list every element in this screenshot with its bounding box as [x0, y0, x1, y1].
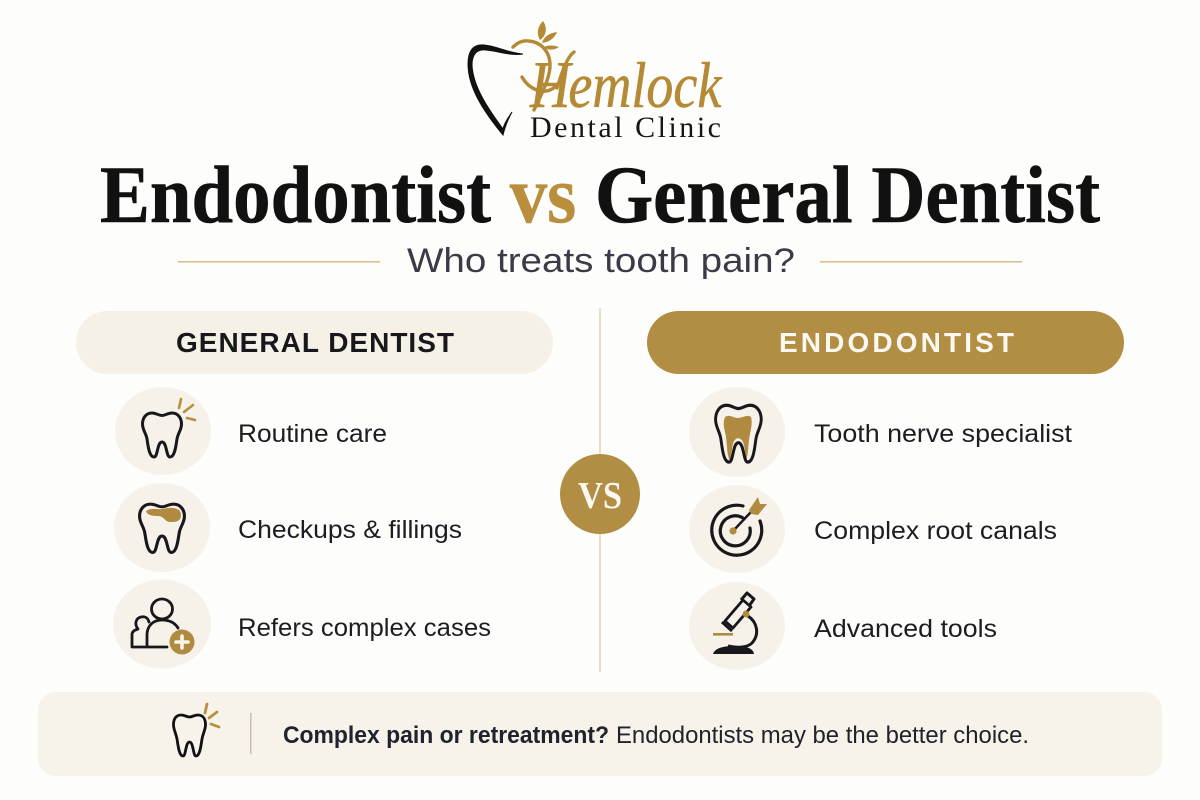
logo: gold flourish [513, 41, 574, 110]
item: routine care [115, 387, 387, 475]
heading: general dentist [76, 311, 553, 374]
logo: script name: Hemlock [529, 48, 723, 122]
item: tooth nerve specialist: Tooth nerve specialist [814, 420, 1072, 448]
icon: tooth with pulp [689, 387, 785, 477]
item: refers complex cases: Refers complex cases [238, 614, 491, 642]
logo: leaves [538, 21, 559, 50]
icon: people with plus [113, 580, 211, 668]
item: advanced tools [689, 582, 997, 670]
item: routine care: Routine care [238, 420, 387, 448]
icon: tooth with sparkle [115, 387, 211, 475]
heading: endodontist: ENDODONTIST [779, 327, 1014, 358]
item: refers complex cases [113, 580, 491, 668]
logo: tooth outline [468, 45, 523, 135]
subtitle: Who treats tooth pain? [407, 242, 795, 280]
callout text: Endodontists may be the better choice. [616, 722, 1029, 749]
heading: general dentist: GENERAL DENTIST [176, 327, 454, 358]
item: checkups and fillings [114, 483, 462, 572]
callout text: Complex pain or retreatment? [283, 722, 609, 749]
item: tooth nerve specialist [689, 387, 1072, 477]
item: checkups and fillings: Checkups & fillings [238, 516, 462, 544]
center divider [599, 308, 601, 672]
item: complex root canals [689, 485, 1057, 573]
callout [38, 692, 1162, 776]
icon: microscope [689, 582, 785, 670]
panel: endodontist [647, 311, 1124, 670]
logo: clinic name: Dental Clinic [530, 111, 721, 144]
badge: VS [560, 454, 640, 534]
title: Endodontist vs General Dentist [100, 149, 1100, 240]
heading: endodontist [647, 311, 1124, 374]
badge: VS: VS [578, 475, 622, 517]
icon: target with arrow [689, 485, 785, 573]
logo: Hemlock Dental Clinic [468, 21, 723, 144]
icon: tooth with sparkle [174, 704, 219, 756]
item: advanced tools: Advanced tools [814, 615, 997, 643]
panel: general dentist [76, 311, 553, 668]
icon: tooth with filling [114, 483, 210, 572]
item: complex root canals: Complex root canals [814, 517, 1057, 545]
